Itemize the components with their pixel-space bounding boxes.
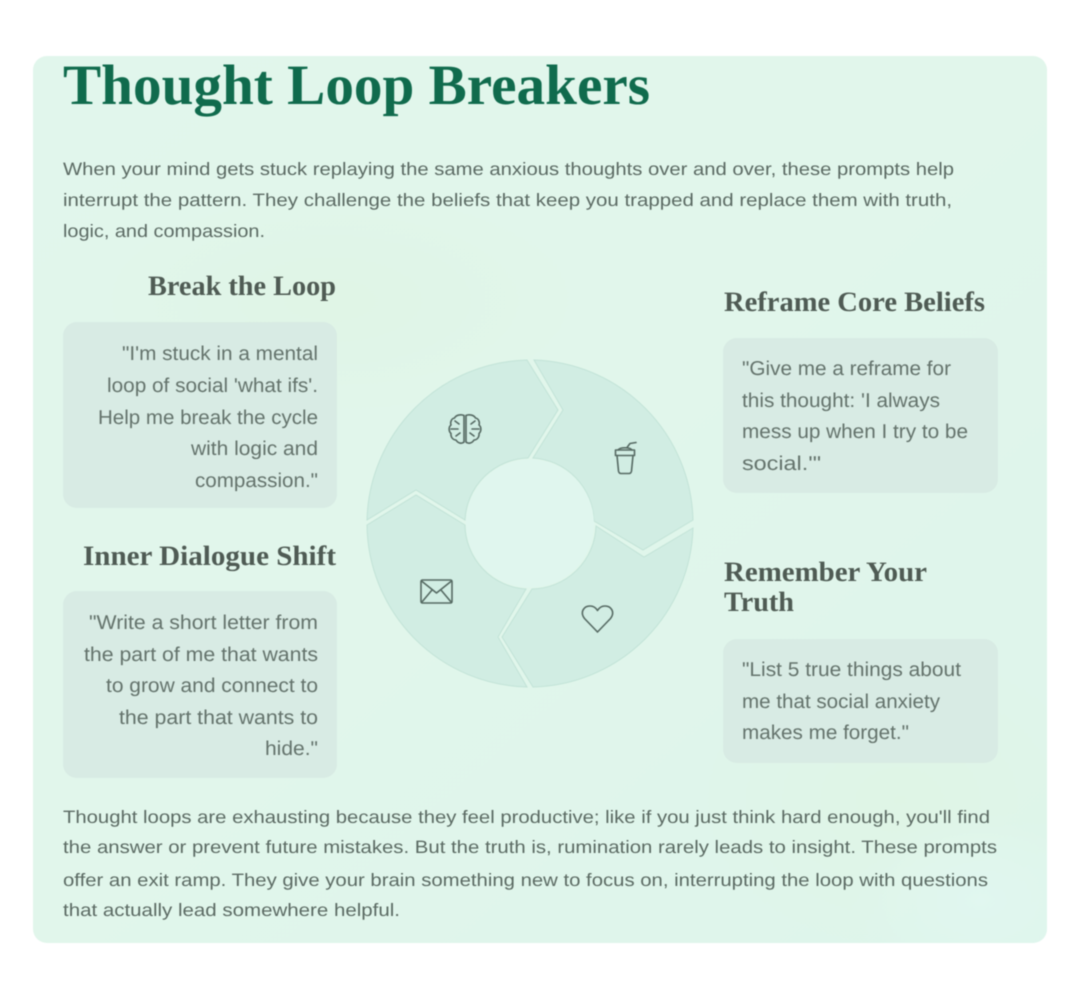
intro text: interrupt the pattern. They challenge the beliefs that keep you trapped and replace them with truth,: [63, 190, 952, 210]
panel: Break the Loop card: compassion.": [195, 470, 318, 492]
intro text: When your mind gets stuck replaying the same anxious thoughts over and over, these prompts help: [63, 159, 954, 179]
panel: Reframe Core Beliefs card: social.'": [742, 453, 821, 475]
closing text: offer an exit ramp. They give your brain something new to focus on, interrupting the loop with questions: [63, 870, 988, 890]
panel: Inner Dialogue Shift card: the part of me that wants: [84, 644, 318, 666]
panel: Reframe Core Beliefs card: "Give me a reframe for: [742, 358, 951, 380]
heading: Inner Dialogue Shift: Inner Dialogue Shift: [83, 541, 337, 572]
segment: bottom left: [367, 495, 527, 687]
panel: Break the Loop card: [63, 322, 337, 508]
panel: Inner Dialogue Shift card: the part that wants to: [119, 707, 318, 729]
icon: brain: [449, 415, 481, 443]
panel: Remember Your Truth card: makes me forget.": [742, 722, 909, 744]
closing text: [63, 807, 997, 920]
panel: Reframe Core Beliefs card: [723, 338, 998, 493]
panel: Break the Loop card: "I'm stuck in a mental: [122, 343, 318, 365]
panel: Break the Loop card: loop of social 'what ifs'.: [107, 375, 318, 397]
heading: Reframe Core Beliefs: Reframe Core Beliefs: [724, 287, 985, 318]
panel: Remember Your Truth card: [723, 639, 998, 763]
intro text: [63, 159, 954, 241]
closing text: Thought loops are exhausting because they feel productive; like if you just think hard enough, you'll find: [63, 807, 990, 827]
panel: Remember Your Truth card: "List 5 true things about: [742, 659, 961, 681]
heading: Remember Your Truth: Remember Your: [724, 557, 927, 588]
panel: Inner Dialogue Shift card: [63, 591, 337, 778]
icon: takeaway cup: [616, 442, 636, 474]
closing text: that actually lead somewhere helpful.: [63, 900, 400, 920]
panel: Break the Loop card: with logic and: [190, 438, 318, 460]
panel: Reframe Core Beliefs card: this thought: 'I always: [742, 390, 940, 412]
segment: bottom right: [502, 526, 693, 687]
title: Thought Loop Breakers: [63, 54, 650, 117]
panel: Inner Dialogue Shift card: hide.": [265, 738, 318, 760]
icon: envelope: [421, 580, 452, 603]
segment: top right: [533, 360, 693, 550]
heading: Break the Loop: Break the Loop: [148, 271, 336, 302]
cycle diagram: [367, 360, 693, 687]
panel: Inner Dialogue Shift card: "Write a short letter from: [89, 612, 318, 634]
icon: heart: [582, 606, 613, 632]
heading: Remember Your Truth: Truth: [724, 587, 794, 618]
panel: Reframe Core Beliefs card: mess up when I try to be: [742, 421, 968, 443]
panel: Break the Loop card: Help me break the cycle: [98, 407, 318, 429]
segment: top left: [367, 360, 558, 520]
center circle: [466, 460, 594, 588]
closing text: the answer or prevent future mistakes. But the truth is, rumination rarely leads to insight. These prompts: [63, 837, 997, 857]
panel: Remember Your Truth card: me that social anxiety: [742, 691, 940, 713]
heading: Remember Your Truth: [724, 557, 927, 618]
panel: Inner Dialogue Shift card: to grow and connect to: [106, 675, 318, 697]
intro text: logic, and compassion.: [63, 221, 265, 241]
